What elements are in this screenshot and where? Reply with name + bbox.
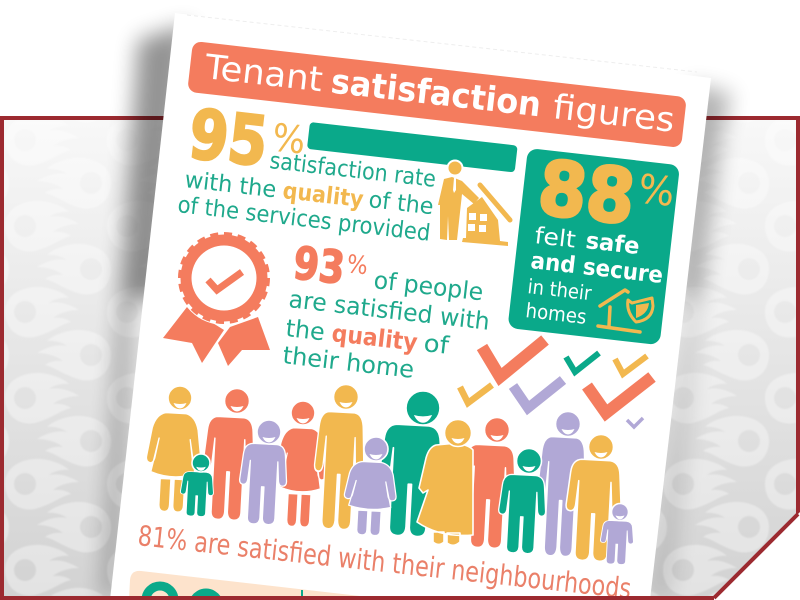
person: man coral right: [471, 418, 514, 548]
page shadow: [104, 24, 732, 596]
person: girl purple: [342, 437, 398, 537]
infographic page: [110, 13, 711, 600]
stat: 95% satisfaction: %: [270, 115, 308, 163]
person: small child purple: [599, 504, 635, 565]
panel: 88% safe and secure: safe: [584, 228, 641, 260]
title banner: satisfaction: [329, 62, 543, 125]
stat: 95% satisfaction: of the services provided: [176, 192, 432, 247]
stat: 93% quality of home: of: [422, 329, 451, 360]
panel: 88% safe and secure: felt: [533, 223, 577, 254]
panel: 88% safe and secure: and secure: [529, 248, 664, 289]
person: man coral: [204, 389, 253, 520]
panel: 88% safe and secure: in their: [526, 274, 593, 305]
stat: 95% satisfaction: 95: [185, 95, 272, 183]
person: boy purple: [237, 420, 288, 525]
icon: businessman and house: [438, 160, 510, 246]
person: woman yellow large: [417, 420, 473, 545]
stat: 93% quality of home: are satisfied with: [287, 285, 491, 336]
panel: 88% safe and secure: [508, 143, 680, 345]
panel: 88% safe and secure: 88: [534, 143, 639, 242]
person: woman yellow: [147, 386, 200, 512]
person: child teal: [179, 454, 215, 517]
title banner: [187, 41, 687, 148]
stat: 95% satisfaction: quality: [281, 178, 365, 213]
stat: 95% satisfaction: of the: [367, 187, 435, 220]
title banner: Tenant: [202, 47, 325, 100]
stat: 93% quality of home: of people: [372, 266, 485, 306]
frame bottom edge and cut corner: [0, 512, 800, 600]
stat: 95% satisfaction: [178, 108, 518, 240]
stat: 95% satisfaction: with the: [183, 167, 278, 203]
stat: 93% quality of home: 93: [291, 236, 347, 295]
person: woman coral: [280, 402, 324, 526]
icon group: check marks: [460, 340, 652, 427]
icon: house with shield: [598, 290, 653, 332]
person: man yellow: [314, 385, 364, 529]
title banner: figures: [551, 87, 677, 141]
icon: rosette badge: [163, 231, 271, 366]
person: man yellow right: [563, 434, 624, 562]
stat: 93% quality of home: the: [284, 314, 326, 346]
illustration: group of people: [144, 384, 635, 565]
stat: 93% quality of home: [284, 245, 488, 378]
person: large man teal: [382, 392, 440, 536]
stat: 93% quality of home: quality: [330, 319, 419, 357]
panel: peach next statistic: [129, 570, 359, 596]
stat: 93% quality of home: %: [345, 249, 369, 280]
stat: 95% satisfaction: satisfaction rate: [268, 148, 437, 193]
person: man purple: [540, 412, 584, 556]
stat: 93% quality of home: their home: [281, 341, 416, 384]
panel: 88% safe and secure: %: [636, 166, 677, 216]
person: boy teal: [496, 448, 547, 554]
panel: 88% safe and secure: homes: [524, 298, 588, 329]
